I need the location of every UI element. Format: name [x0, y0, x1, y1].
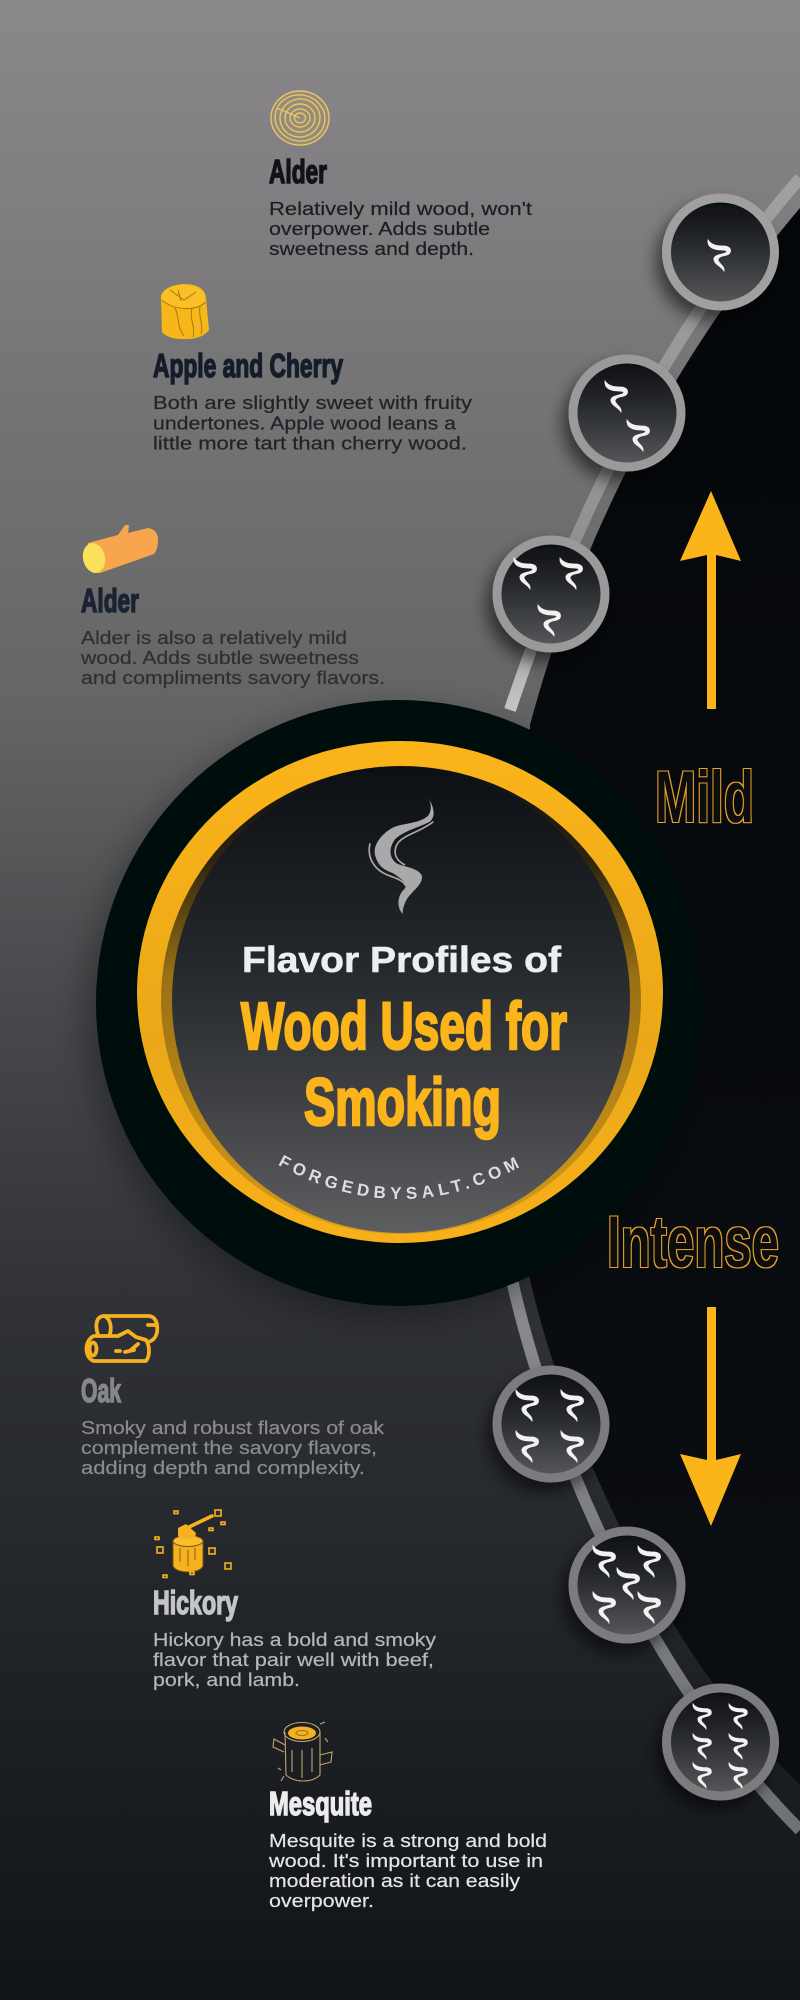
description: Mesquite is a strong and bold	[269, 1831, 547, 1851]
direction arrow up	[680, 491, 741, 709]
description: wood. Adds subtle sweetness	[80, 648, 359, 668]
description	[153, 393, 472, 454]
icon: two logs	[86, 1316, 157, 1361]
description: Smoky and robust flavors of oak	[81, 1418, 385, 1438]
description: Relatively mild wood, won't	[269, 199, 532, 219]
heading: Oak	[81, 1372, 121, 1409]
title: line 1: Flavor Profiles of	[242, 939, 562, 980]
title: line 3: Smoking	[304, 1065, 501, 1140]
description: and compliments savory flavors.	[81, 668, 385, 688]
direction arrow down	[680, 1307, 741, 1526]
upper intensity track	[510, 178, 800, 710]
description: Hickory has a bold and smoky	[153, 1630, 436, 1650]
block: Mesquite	[268, 1722, 547, 1911]
description	[268, 1831, 547, 1911]
heading: Apple and Cherry	[153, 347, 343, 384]
block: Hickory	[153, 1510, 436, 1690]
inner disc	[172, 767, 630, 1233]
heading: Alder	[269, 153, 327, 190]
knob: four smokes	[497, 1370, 605, 1478]
description: sweetness and depth.	[269, 239, 474, 259]
label: Mild: Mild	[655, 757, 754, 838]
description	[269, 199, 532, 259]
block: Oak	[81, 1316, 385, 1478]
heading: Hickory	[153, 1584, 238, 1621]
description	[153, 1630, 436, 1690]
description: Alder is also a relatively mild	[81, 628, 347, 648]
knob: five smokes	[573, 1531, 681, 1639]
heading: Mesquite	[269, 1785, 372, 1822]
knob: six smokes	[666, 1688, 774, 1796]
description	[81, 1418, 385, 1478]
dark right panel	[530, 208, 800, 1785]
centre badge	[80, 700, 702, 1320]
knob: one smoke	[666, 198, 774, 306]
icon: branching trunk	[273, 1722, 332, 1781]
icon: log	[80, 525, 158, 575]
ring bevel	[161, 766, 641, 1234]
description: little more tart than cherry wood.	[153, 434, 467, 454]
description: pork, and lamb.	[153, 1670, 300, 1690]
block: Apple and Cherry	[153, 284, 472, 454]
knob: three smokes	[497, 540, 605, 648]
heading: Alder	[81, 582, 139, 619]
description: Both are slightly sweet with fruity	[153, 393, 472, 413]
description: undertones. Apple wood leans a	[153, 414, 457, 434]
block: Alder (log)	[80, 525, 385, 688]
icon: smoke emblem	[369, 798, 434, 914]
icon: tree rings	[271, 90, 329, 146]
icon: stump	[161, 284, 209, 339]
description: wood. It's important to use in	[268, 1851, 543, 1871]
description: overpower.	[269, 1891, 374, 1911]
title: line 2: Wood Used for	[241, 989, 567, 1064]
lower intensity track	[512, 1280, 800, 1830]
description: flavor that pair well with beef,	[153, 1650, 434, 1670]
description	[80, 628, 385, 688]
description: overpower. Adds subtle	[269, 219, 490, 239]
website curved label: FORGEDBYSALT.COM	[278, 1155, 519, 1199]
knob: two smokes	[573, 359, 681, 467]
gold ring	[137, 741, 663, 1243]
black outer disc	[96, 700, 702, 1306]
description: moderation as it can easily	[269, 1871, 520, 1891]
block: Alder (rings)	[269, 90, 532, 259]
description: adding depth and complexity.	[81, 1458, 365, 1478]
icon: axe in stump	[155, 1510, 231, 1578]
description: complement the savory flavors,	[81, 1438, 377, 1458]
